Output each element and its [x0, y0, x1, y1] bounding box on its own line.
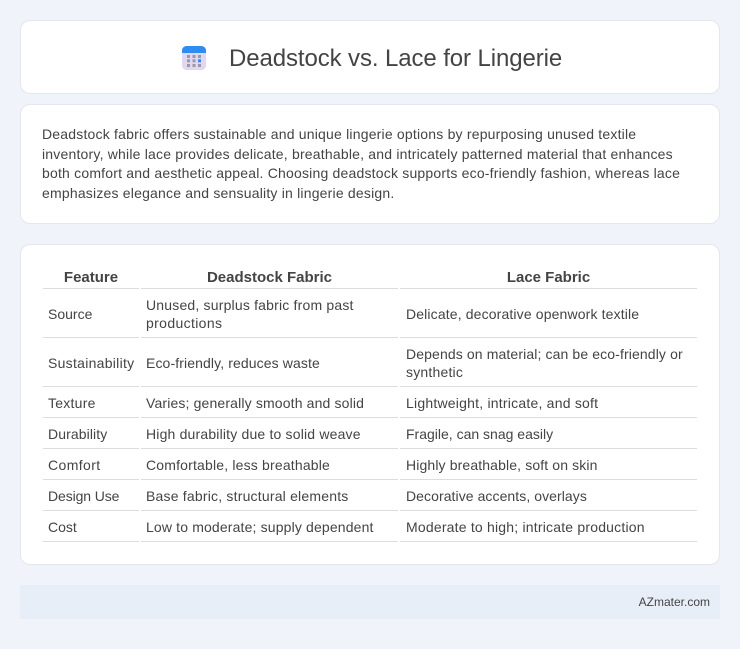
table header: Deadstock Fabric	[207, 269, 332, 286]
summary text: both comfort and aesthetic appeal. Choosing deadstock supports eco-friendly fashion, whereas lace	[42, 165, 680, 181]
row: design use	[48, 488, 587, 504]
title: Deadstock vs. Lace for Lingerie	[229, 45, 562, 72]
table header: Feature	[64, 269, 118, 286]
row: durability: High durability due to solid weave	[146, 426, 361, 442]
panel: summary card	[20, 104, 720, 224]
row: cost	[48, 519, 645, 535]
row: cost: Low to moderate; supply dependent	[146, 519, 374, 535]
row: sustainability: Eco-friendly, reduces waste	[146, 355, 320, 371]
row: sustainability: synthetic	[406, 364, 463, 380]
summary text	[42, 126, 680, 201]
row: design use: Design Use	[48, 488, 119, 504]
icon: calendar	[182, 46, 206, 70]
row: texture: Lightweight, intricate, and soft	[406, 395, 598, 411]
row: source	[48, 297, 639, 331]
row: source: Unused, surplus fabric from past	[146, 297, 354, 313]
row: sustainability	[48, 346, 683, 380]
row: sustainability: Sustainability	[48, 355, 134, 371]
row: cost: Moderate to high; intricate production	[406, 519, 645, 535]
footer brand text: AZmater.com	[639, 595, 710, 609]
row: texture: Texture	[48, 395, 96, 411]
row: cost: Cost	[48, 519, 77, 535]
summary text: inventory, while lace provides delicate, breathable, and intricately patterned material that enhances	[42, 146, 673, 162]
row: source: Delicate, decorative openwork textile	[406, 306, 639, 322]
row: durability: Fragile, can snag easily	[406, 426, 553, 442]
row: comfort: Comfort	[48, 457, 101, 473]
row: texture	[48, 395, 598, 411]
row: design use: Base fabric, structural elements	[146, 488, 348, 504]
row: comfort	[48, 457, 598, 473]
panel: title card	[20, 20, 720, 94]
table header: Lace Fabric	[507, 269, 590, 286]
row: texture: Varies; generally smooth and solid	[146, 395, 364, 411]
row: sustainability: Depends on material; can be eco-friendly or	[406, 346, 683, 362]
row: comfort: Comfortable, less breathable	[146, 457, 330, 473]
row: durability	[48, 426, 554, 442]
row: comfort: Highly breathable, soft on skin	[406, 457, 598, 473]
row: source: productions	[146, 315, 222, 331]
summary text: Deadstock fabric offers sustainable and unique lingerie options by repurposing unused textile	[42, 126, 636, 142]
panel: comparison table	[20, 244, 720, 565]
row: design use: Decorative accents, overlays	[406, 488, 587, 504]
summary text: emphasizes elegance and sensuality in lingerie design.	[42, 184, 394, 200]
row: durability: Durability	[48, 426, 107, 442]
row: source: Source	[48, 306, 92, 322]
table header	[64, 269, 590, 286]
footer bar	[20, 585, 720, 619]
